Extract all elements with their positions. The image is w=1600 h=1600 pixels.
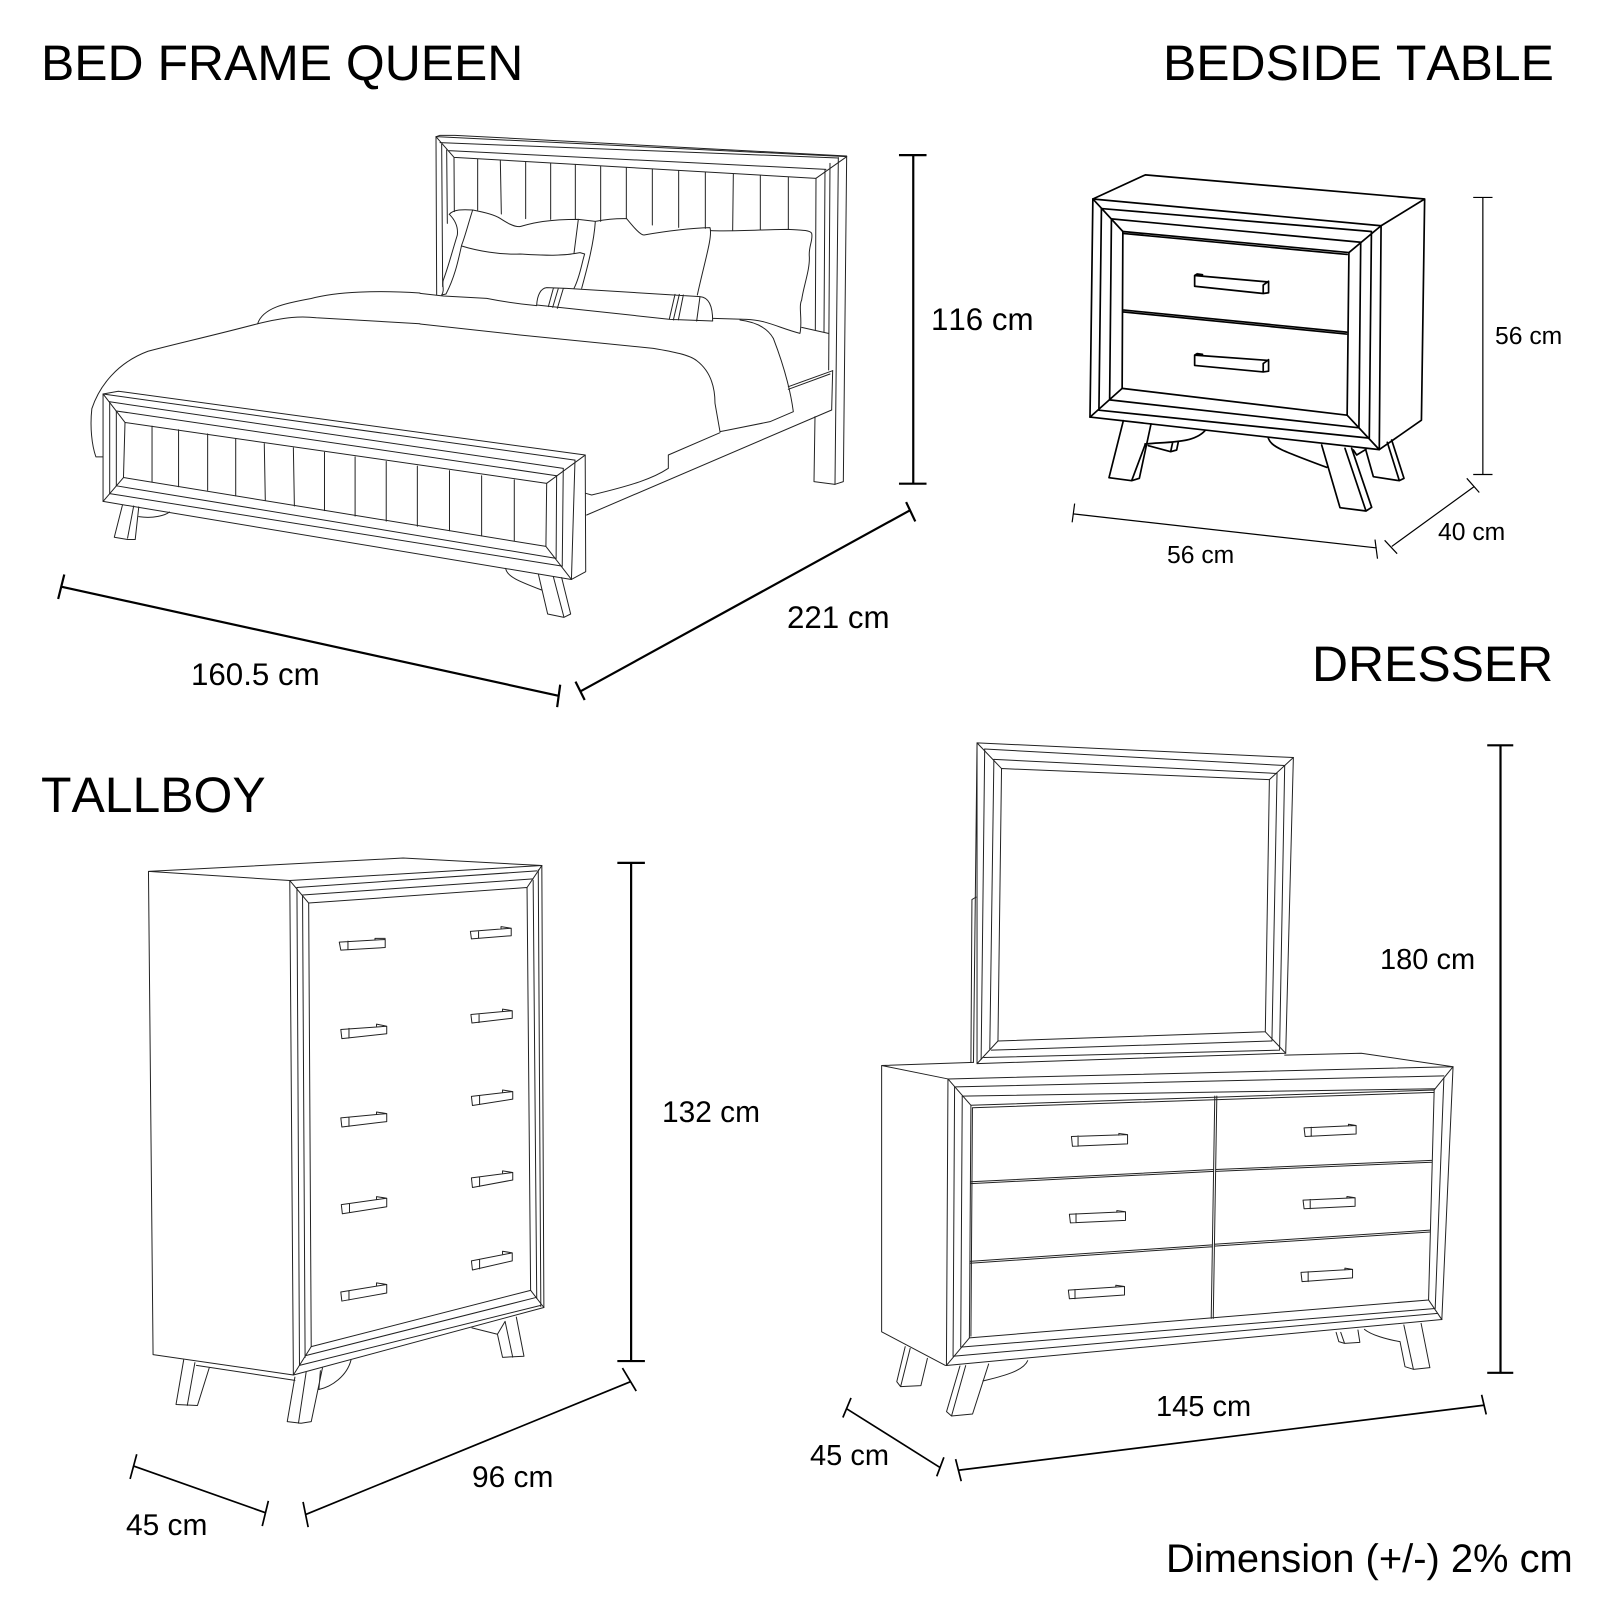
heading: bedside table: BEDSIDE TABLE — [1163, 35, 1554, 91]
note: dimension tolerance: Dimension (+/-) 2% cm — [1166, 1537, 1573, 1581]
drawer handles — [1195, 274, 1269, 372]
label: 145 cm: 145 cm — [1156, 1391, 1251, 1423]
dimension: bedside depth 40 cm — [1385, 478, 1479, 554]
heading: tallboy: TALLBOY — [41, 767, 266, 823]
cabinet body — [148, 858, 544, 1375]
dimension: dresser height 180 cm — [1487, 745, 1513, 1373]
label: 45 cm: 45 cm — [810, 1440, 889, 1472]
drawing: bed frame — [91, 135, 847, 617]
label: 132 cm: 132 cm — [662, 1096, 760, 1129]
label: 40 cm: 40 cm — [1438, 519, 1505, 546]
label: 116 cm: 116 cm — [931, 302, 1034, 337]
legs — [176, 1317, 524, 1423]
dimension: dresser width 145 cm — [956, 1395, 1486, 1481]
blanket left side — [91, 292, 420, 457]
front right leg — [506, 568, 571, 617]
label: 56 cm width: 56 cm — [1167, 542, 1234, 569]
legs — [897, 1323, 1430, 1416]
footboard — [103, 391, 586, 579]
legs — [1109, 421, 1404, 511]
drawing: dresser with mirror — [882, 743, 1453, 1416]
headboard and bedding — [420, 135, 847, 515]
dimension: bedside height 56 cm — [1473, 197, 1492, 474]
handles: left column — [339, 938, 387, 1301]
dimension: bedside width 56 cm — [1072, 504, 1377, 559]
label: 96 cm: 96 cm — [472, 1461, 553, 1494]
mirror — [971, 743, 1293, 1064]
heading: dresser: DRESSER — [1312, 636, 1553, 692]
cabinet body — [882, 1053, 1453, 1365]
dimension: tallboy depth 45 cm — [130, 1454, 268, 1526]
dimension: tallboy height 132 cm — [617, 863, 645, 1361]
drawers — [970, 1096, 1432, 1318]
heading: bed frame queen: BED FRAME QUEEN — [41, 35, 523, 91]
label: 56 cm height: 56 cm — [1495, 323, 1562, 350]
dimension: bed length 221 cm — [576, 502, 915, 700]
dimension: tallboy width 96 cm — [303, 1368, 636, 1527]
drawer handles — [1068, 1124, 1356, 1299]
handles: right column — [470, 927, 513, 1270]
drawing: tallboy — [148, 858, 544, 1423]
dimension: bed width 160.5 cm — [58, 574, 560, 707]
drawing: bedside table — [1090, 175, 1425, 511]
label: 221 cm: 221 cm — [787, 600, 890, 635]
drawers — [1122, 232, 1349, 415]
label: 180 cm: 180 cm — [1380, 944, 1475, 976]
label: 45 cm: 45 cm — [126, 1509, 207, 1542]
cabinet body — [1090, 175, 1425, 450]
dimension: dresser depth 45 cm — [843, 1398, 944, 1476]
dimension: bed height 116 cm — [899, 155, 927, 484]
label: 160.5 cm: 160.5 cm — [191, 657, 320, 692]
